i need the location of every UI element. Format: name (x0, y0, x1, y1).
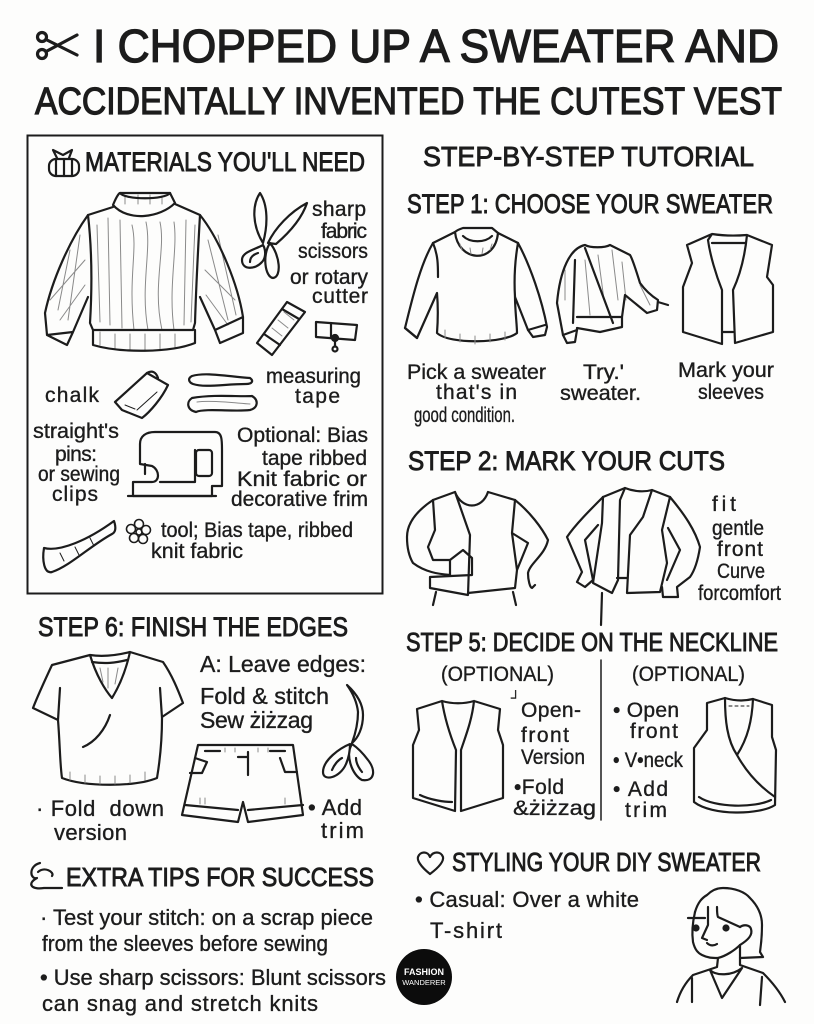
text: fold down: version (54, 820, 127, 845)
text: open front: Open- (521, 699, 581, 722)
text: leave edges: Sew żiżzag (200, 707, 313, 733)
text: tips: can snag and stretch knits (42, 991, 318, 1016)
icon: thread spool (257, 302, 305, 355)
icon: small scissors (323, 685, 373, 780)
text: optional (231, 424, 368, 511)
text: step 1 captions: that's in (436, 381, 517, 404)
text: fit curve: forcomfort (698, 582, 781, 605)
step 6 (33, 612, 373, 845)
step 2 (407, 446, 781, 625)
text: scissors label: scissors (298, 240, 368, 263)
text: optional: Knit fabric or (237, 468, 367, 491)
title (35, 20, 782, 123)
styling (415, 847, 785, 1005)
step 5 (406, 627, 778, 822)
text: step 1 captions: Try.' (583, 361, 624, 384)
icon: tips (31, 863, 62, 888)
heading: extra tips: EXTRA TIPS FOR SUCCESS (66, 862, 374, 892)
text: scissors label (290, 198, 368, 308)
icon: ribbon tape (43, 521, 115, 572)
divider (600, 660, 602, 820)
text: pins (33, 420, 120, 506)
text: leave edges: A: Leave edges: (200, 651, 366, 677)
text: scissors label: fabric (321, 220, 367, 243)
text: optional: decorative frim (231, 488, 368, 511)
text: add trim: • Add (308, 795, 362, 820)
badge: fashion wanderer (396, 949, 452, 1005)
icon: flower (126, 520, 150, 544)
text: measuring tape: tape (295, 385, 340, 408)
text: measuring tape (266, 365, 361, 408)
text: pins: or sewing (38, 463, 120, 486)
text: tool (151, 519, 353, 563)
text: step 1 captions: sweater. (560, 382, 641, 405)
panel: materials (28, 136, 382, 594)
text: open front v-neck: • Add (613, 778, 668, 801)
text: optional labels (441, 663, 745, 686)
text: open front: front (521, 724, 569, 747)
icon: vest (683, 234, 773, 344)
text: tips: • Use sharp scissors: Blunt scissors (40, 965, 386, 990)
heading: step 6: STEP 6: FINISH THE EDGES (38, 612, 348, 642)
text: open front v-neck: front (630, 720, 678, 743)
text: add trim (308, 795, 364, 843)
icon: v-neck tee (33, 652, 183, 785)
text: leave edges (200, 651, 366, 733)
text: step 1 captions: Mark your (678, 359, 774, 382)
icon: tape cutter (316, 322, 357, 352)
text: leave edges: Fold & stitch (200, 683, 329, 709)
extra tips (31, 862, 386, 1016)
text: open front v-neck (613, 699, 683, 822)
text: open front: •Fold (514, 776, 564, 799)
text: add trim: trim (321, 818, 364, 843)
icon: scissors (242, 193, 307, 278)
text: open front (510, 690, 596, 820)
text: chalk: chalk (45, 384, 100, 407)
icon: title scissors (38, 32, 77, 58)
icon: woman portrait (677, 888, 785, 1005)
text: tool: knit fabric (151, 540, 243, 563)
text: open front v-neck: • Open (613, 699, 679, 722)
text: fit curve: Curve (717, 560, 765, 583)
text: measuring tape: measuring (266, 365, 361, 388)
text: open front v-neck: trim (625, 799, 667, 822)
heading: step 2: STEP 2: MARK YOUR CUTS (408, 446, 725, 476)
text: scissors label: sharp (312, 198, 366, 221)
text: open front v-neck: • V•neck (613, 749, 683, 772)
text: fit curve: fit (712, 493, 736, 516)
text: scissors label: cutter (312, 285, 368, 308)
text: optional labels: (OPTIONAL) (632, 663, 745, 686)
badge: fashion wanderer: WANDERER (402, 978, 446, 987)
icon: rolled sweater (557, 245, 668, 343)
text: pins: straight's (33, 420, 119, 443)
text: tips: from the sleeves before sewing (42, 931, 328, 956)
text: fit curve: gentle (712, 517, 764, 540)
text: styling (415, 887, 639, 943)
text: optional: Optional: Bias (237, 424, 368, 447)
icon: heart (418, 852, 443, 874)
icon: yarn gift (49, 150, 79, 176)
text: fold down (36, 796, 164, 845)
step 1 (405, 189, 774, 427)
text: pins: clips (52, 483, 98, 506)
title: I CHOPPED UP A SWEATER AND (93, 20, 779, 72)
text: open front: &żiżzag (513, 797, 596, 820)
figure: open vest (567, 488, 700, 625)
heading: materials: MATERIALS YOU'LL NEED (85, 147, 365, 177)
text: fold down: · Fold down (36, 796, 164, 821)
icon: open front vest (413, 701, 503, 811)
text: scissors label: or rotary (290, 266, 368, 289)
text: tips: · Test your stitch: on a scrap piece (40, 905, 373, 930)
text: open front: ┘ (510, 690, 520, 705)
text: pins: pins: (55, 443, 97, 466)
text: optional labels: (OPTIONAL) (441, 663, 554, 686)
text: step 1 captions: good condition. (414, 404, 515, 427)
badge: fashion wanderer: FASHION (404, 967, 444, 977)
text: tips (40, 905, 386, 1016)
icon: chalk (115, 372, 168, 418)
text: optional: tape ribbed (262, 447, 367, 470)
text: fit curve (698, 493, 781, 605)
icon: sweater (405, 228, 547, 344)
icon: shorts (182, 745, 303, 822)
text: open front: Version (521, 746, 585, 769)
heading: tutorial: STEP-BY-STEP TUTORIAL (423, 141, 754, 172)
text: styling: T-shirt (430, 918, 502, 943)
figure: marking front (407, 492, 548, 605)
text: step 1 captions: sleeves (698, 381, 764, 404)
icon: wrap vest (694, 698, 776, 813)
text: styling: • Casual: Over a white (415, 887, 639, 912)
text: fit curve: front (717, 538, 763, 561)
text: tool: tool; Bias tape, ribbed (161, 519, 353, 542)
icon: cable knit sweater (45, 193, 243, 351)
icon: measuring tapes (188, 374, 257, 412)
text: step 1 captions (407, 359, 774, 427)
icon: sewing machine (128, 432, 222, 496)
text: step 1 captions: Pick a sweater (407, 361, 546, 384)
